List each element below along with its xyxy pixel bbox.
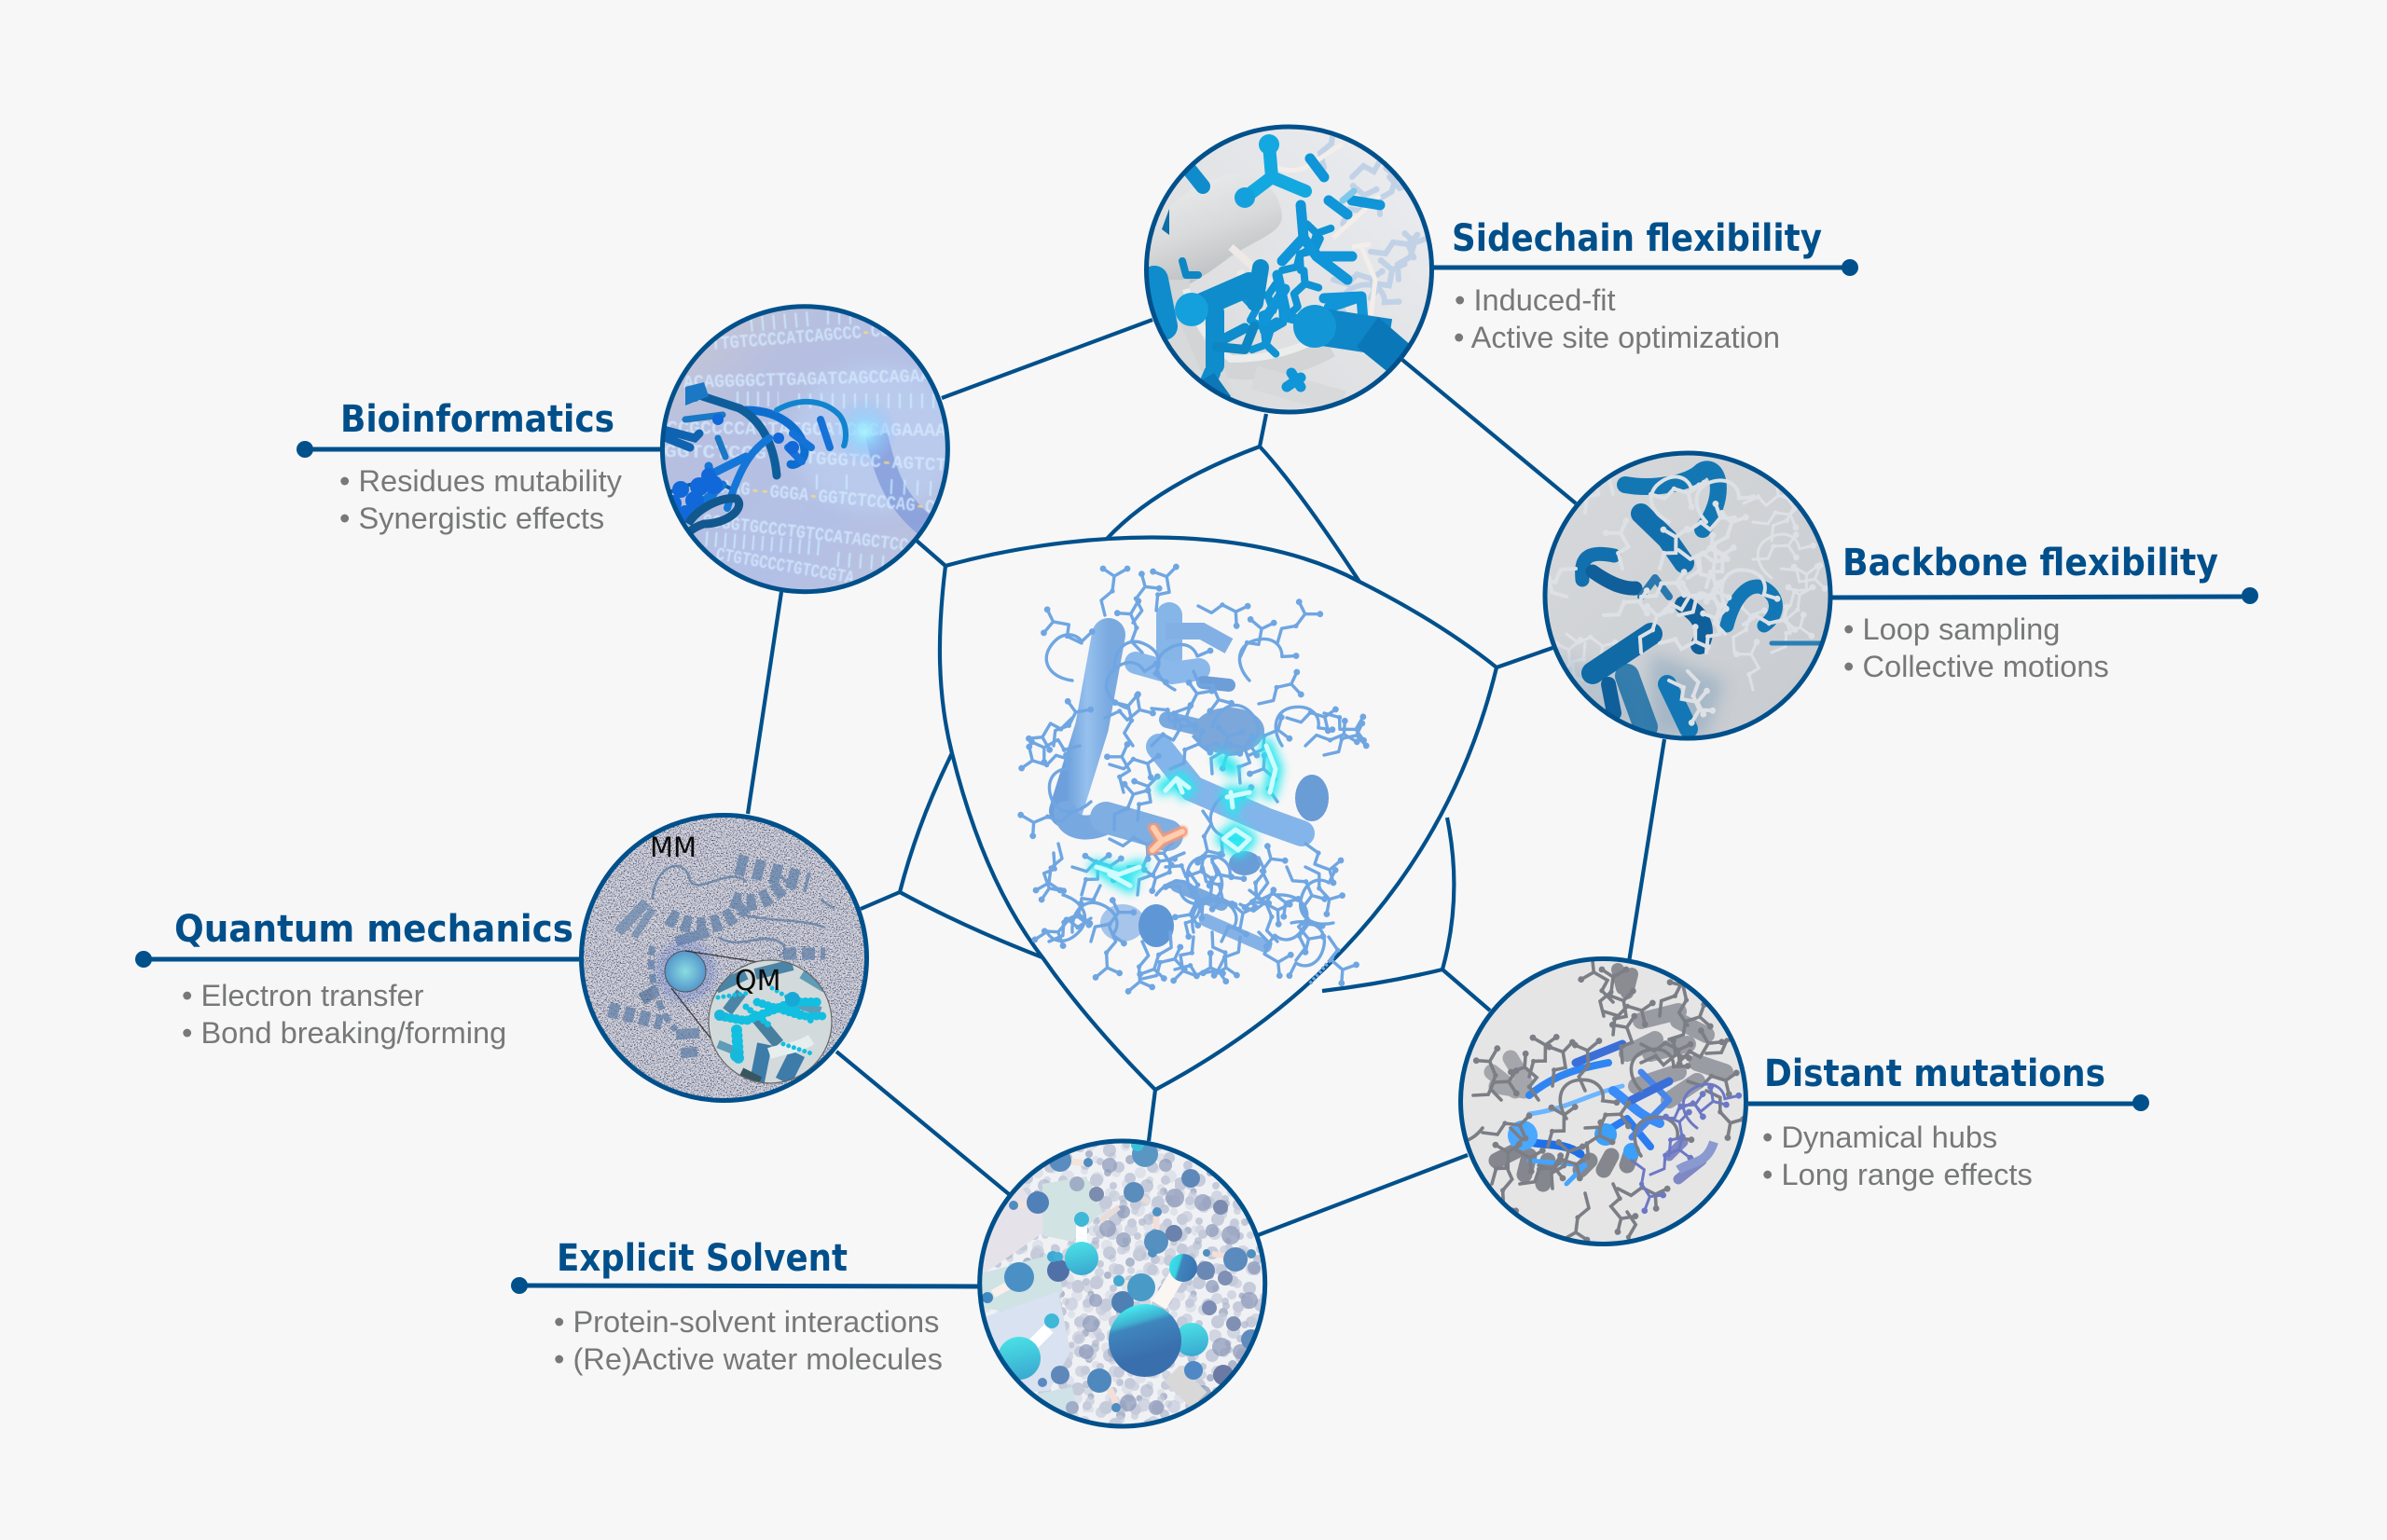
panel: Bioinformatics image: CCGCCCCAGTATGCATCCCAGAAAA xyxy=(667,419,946,443)
heading: Distant mutations xyxy=(1764,1052,2105,1095)
panel: Bioinformatics image: TTGTCCCCATCAGCCC-CC xyxy=(711,321,890,356)
panel: Sidechain flexibility image xyxy=(1139,118,1441,419)
QM label: QM xyxy=(735,965,781,997)
bullet list: • Collective motions xyxy=(1843,649,2109,683)
bullet list xyxy=(1454,282,1780,354)
connector line with end dot xyxy=(135,951,579,968)
heading: Bioinformatics xyxy=(340,398,614,441)
bullet list: • Residues mutability xyxy=(339,463,623,498)
heading: Quantum mechanics xyxy=(174,908,573,951)
panel: Quantum mechanics label xyxy=(135,908,579,1050)
heading: Backbone flexibility xyxy=(1842,542,2218,584)
panel: Bioinformatics label xyxy=(297,398,660,535)
central protein structure xyxy=(1016,556,1374,997)
bullet list: • Bond breaking/forming xyxy=(182,1015,506,1050)
panel: Quantum mechanics image xyxy=(578,811,872,1106)
central curved triangle frame xyxy=(940,537,1497,1090)
connector line with end dot xyxy=(511,1277,978,1294)
panel: Bioinformatics image: CTGTGCCCTGTCCGTA xyxy=(714,544,855,590)
connector line with end dot xyxy=(1748,1094,2149,1111)
panel: Explicit Solvent image xyxy=(977,1139,1268,1428)
panel: Bioinformatics image: TGGGTCC-AGTCT xyxy=(805,448,947,477)
heading: Sidechain flexibility xyxy=(1452,217,1822,260)
bullet list xyxy=(1762,1120,2033,1191)
MM label: MM xyxy=(650,832,697,863)
panel: Distant mutations label xyxy=(1748,1052,2149,1191)
bullet list: • Protein-solvent interactions xyxy=(554,1304,939,1339)
panel: Bioinformatics image: GCGGTGCCCTGTCCATAGCTCC xyxy=(701,511,909,557)
bullet list: • Loop sampling xyxy=(1843,612,2060,646)
bullet list: • Synergistic effects xyxy=(339,501,604,535)
panel: Bioinformatics image xyxy=(657,303,960,601)
bullet list xyxy=(1843,612,2109,683)
panel: Distant mutations image xyxy=(1458,956,1748,1246)
panel: Sidechain flexibility label xyxy=(1433,217,1858,354)
bullet list xyxy=(554,1304,943,1376)
panel: Bioinformatics image: GGTCTCCG xyxy=(664,442,766,465)
bullet list: • Induced-fit xyxy=(1455,282,1616,317)
bullet list xyxy=(339,463,623,535)
bullet list: • Electron transfer xyxy=(182,978,424,1012)
bullet list xyxy=(182,978,506,1050)
panel: Bioinformatics image: AAG--GGGA-GGTCTCCCAG-C xyxy=(720,477,935,519)
panel: Backbone flexibility label xyxy=(1832,542,2258,683)
panel: Explicit Solvent label xyxy=(511,1237,978,1376)
panel: Bioinformatics image: ACAGGGGCTTGAGATCAGCCAGAA xyxy=(683,366,931,394)
heading: Explicit Solvent xyxy=(557,1237,848,1280)
bullet list: • Active site optimization xyxy=(1454,320,1780,354)
network of connecting lines xyxy=(748,320,1664,1235)
connector line with end dot xyxy=(1433,259,1858,276)
bullet list: • Dynamical hubs xyxy=(1762,1120,1997,1154)
bullet list: • Long range effects xyxy=(1762,1157,2033,1191)
connector line with end dot xyxy=(1832,587,2258,604)
connector line with end dot xyxy=(297,441,660,458)
bullet list: • (Re)Active water molecules xyxy=(554,1341,943,1376)
panel: Backbone flexibility image xyxy=(1542,451,1833,740)
